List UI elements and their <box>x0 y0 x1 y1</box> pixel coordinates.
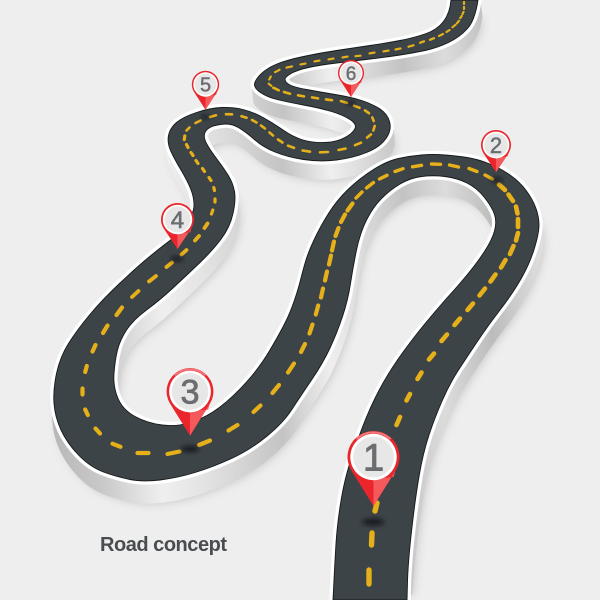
pin 4: 4 <box>171 207 184 234</box>
pin 5: 5 <box>200 75 211 97</box>
yellow centre line dashes <box>82 2 518 584</box>
pin 2: 2 <box>490 133 502 158</box>
pin 3: 3 <box>180 374 200 412</box>
pin 6: 6 <box>346 64 356 85</box>
pin 2 <box>481 130 511 182</box>
pin 5 <box>192 71 219 119</box>
pin 1 <box>348 431 400 526</box>
pin 1: 1 <box>363 438 384 480</box>
pin 3 <box>167 368 213 452</box>
road drop shadow <box>58 20 543 595</box>
road side wall <box>54 5 540 593</box>
title: Road concept: Road concept <box>100 534 227 556</box>
pin 6 <box>338 60 364 105</box>
pin 4 <box>161 203 194 261</box>
